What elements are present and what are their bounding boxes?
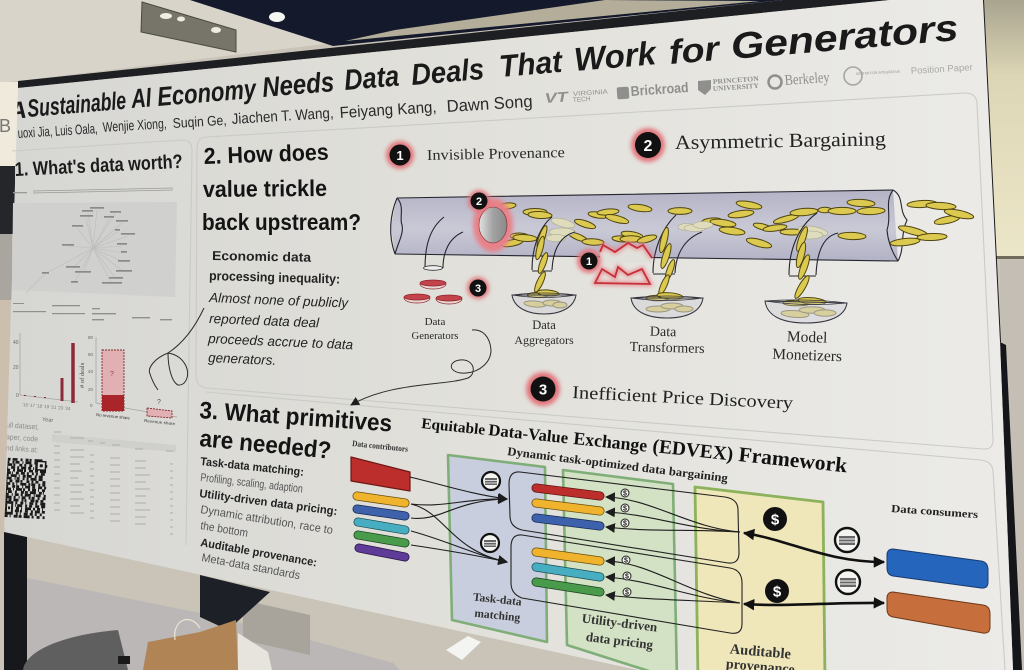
data contributors label: Data contributors (352, 438, 409, 454)
falling coins (533, 225, 812, 300)
contributor arrows (410, 477, 507, 562)
title: Generators (729, 7, 960, 67)
price icons: $ (623, 506, 627, 512)
contributor stripes (357, 496, 405, 557)
text: economic data processing inequality: proceeds accrue to data (207, 331, 354, 352)
title: Sustainable (26, 87, 127, 123)
chart: deals per year: Year (42, 417, 54, 424)
affiliation logos: UNIVERSITY (713, 82, 759, 93)
chart: deals per year: '16 '17 '18 '19 '21 '23 '24 (22, 402, 71, 411)
badge: invisible provenance: Invisible Provenance (427, 145, 565, 164)
heading: how does value trickle back upstream: 2. How does (203, 139, 329, 169)
authors: Feiyang Kang, (339, 99, 437, 122)
affiliation logos: TECH (573, 96, 591, 104)
title (17, 20, 956, 118)
authors: uoxi Jia, Luis Oala, (17, 120, 98, 141)
data generator disks (404, 280, 462, 304)
chart: deals per year: 20 (13, 365, 19, 371)
chart: revenue share: Revenue share (144, 418, 176, 426)
stakeholder labels: Data (425, 316, 445, 328)
heading: what primitives are needed: are needed? (198, 425, 332, 465)
network chart (12, 188, 177, 297)
small badge 1: 1 (586, 256, 592, 268)
coins in the pipe (498, 199, 885, 250)
pipeline diagram (391, 190, 974, 323)
title: That (498, 44, 565, 84)
inner stripes bottom (536, 552, 600, 592)
chart: deals per year (13, 333, 78, 424)
stage: task-data matching: Task-data (472, 591, 522, 609)
text: primitive list: the bottom (200, 520, 249, 540)
badge: invisible provenance (386, 141, 565, 169)
stakeholder labels: Aggregators (514, 333, 574, 347)
framework title: Framework (737, 442, 849, 477)
badge: asymmetric bargaining (631, 128, 886, 162)
text: primitive list: Task-data matching: (200, 456, 304, 479)
heading: what's data worth: 1. What's data worth? (14, 151, 183, 181)
authors: Jiachen T. Wang, (231, 105, 334, 128)
chart: revenue share: ? (157, 399, 161, 406)
small badge 3: 3 (475, 283, 481, 295)
provenance dollar icons: $ (773, 584, 782, 600)
inner stripes top (536, 488, 600, 526)
authors: Wenjie Xiong, (102, 115, 167, 135)
price icons: $ (625, 574, 629, 580)
authors (18, 96, 532, 138)
affiliation logos: PRINCETON (713, 75, 759, 86)
title: A (7, 97, 28, 125)
affiliation logos: Position Paper (911, 62, 973, 77)
coins leaving the pipe (890, 200, 974, 247)
title: Work (572, 34, 659, 78)
dataset link text: and links at: (2, 443, 38, 455)
stakeholder labels: Data (650, 325, 677, 340)
dataset link text (6, 422, 38, 452)
small badge 3 (467, 277, 489, 299)
chart: revenue share: # of deals (79, 362, 86, 388)
text: economic data processing inequality: Economic data (212, 248, 312, 265)
heading: how does value trickle back upstream: back upstream? (202, 209, 361, 235)
badge: inefficient price discovery (526, 372, 794, 413)
stakeholder labels: Generators (412, 330, 458, 342)
text: primitive list (199, 456, 338, 582)
framework title (421, 416, 849, 477)
chart: revenue share: 40 (88, 369, 94, 374)
small badge 2: 2 (476, 196, 482, 208)
text: economic data processing inequality: reported data deal (209, 311, 320, 330)
chart: revenue share: No revenue share (96, 412, 131, 421)
badge: inefficient price discovery: 3 (539, 382, 547, 398)
data consumers label: Data consumers (891, 503, 979, 521)
framework title: (EDVEX) (651, 436, 734, 465)
text: primitive list: Meta-data standards (200, 552, 301, 582)
chart: deals per year: 0 (16, 393, 19, 399)
stage: utility-driven data pricing (563, 470, 677, 670)
chart: revenue share: 60 (88, 352, 94, 357)
provenance dollar icons (763, 507, 789, 603)
affiliation logos: VIRGINIA (573, 89, 609, 98)
dataset link text: Full dataset, (2, 420, 39, 432)
stakeholder labels: Transformers (629, 340, 705, 357)
database icons (481, 472, 860, 594)
task group outlines (509, 472, 742, 633)
badge: invisible provenance: 1 (396, 148, 404, 163)
affiliation logos: VT (544, 88, 570, 106)
affiliation logos: Brickroad (630, 79, 689, 99)
stakeholder labels: Data (532, 318, 556, 332)
authors: Suqin Ge, (172, 112, 227, 131)
title: Economy (156, 74, 259, 112)
title: AI (129, 82, 153, 114)
price icons: $ (624, 558, 628, 564)
small badge 2 (468, 190, 490, 212)
chart: revenue share: 0 (90, 403, 93, 408)
consumer: orange (887, 592, 990, 633)
affiliation logos: CENTER FOR INTEGRATIVE (856, 70, 901, 76)
framework title: Data-Value (488, 420, 569, 447)
price icons: $ (623, 490, 627, 498)
text: economic data processing inequality: generators. (208, 350, 276, 368)
chart: revenue share: ? (110, 371, 114, 378)
affiliation logos (544, 62, 973, 106)
framework title: Exchange (573, 428, 648, 456)
stage: auditable provenance: Auditable (729, 641, 792, 663)
authors: Dawn Song (446, 92, 533, 116)
text: economic data processing inequality (207, 248, 354, 368)
text: primitive list: Utility-driven data pricing: (199, 488, 338, 518)
chart: revenue share: 80 (88, 335, 94, 340)
price icons: $ (625, 590, 629, 596)
chart: revenue share (79, 335, 177, 426)
price icons (621, 489, 631, 596)
stakeholder labels: Monetizers (772, 346, 842, 365)
hand-drawn arrow to framework (351, 330, 491, 405)
heading: what primitives are needed: 3. What primitives (199, 397, 393, 437)
hand-drawn arrow to inequality text (149, 308, 204, 390)
provenance dollar icons: $ (771, 512, 780, 528)
text: economic data processing inequality: Almost none of publicly (208, 290, 350, 311)
stage: utility-driven data pricing: Utility-driven (581, 610, 659, 635)
edvex framework diagram (351, 455, 990, 670)
affiliation logos: Berkeley (784, 70, 831, 89)
spouts (425, 217, 463, 268)
red jagged break (595, 243, 652, 284)
title: Deals (410, 53, 485, 92)
dataset link text: paper, code (2, 432, 38, 444)
hole in the pipe (473, 198, 513, 252)
stage: task-data matching: matching (474, 608, 521, 624)
foreground: carpet and items (23, 619, 481, 670)
price icons: $ (623, 520, 627, 528)
framework subtitle: Dynamic task-optimized data bargaining (507, 444, 729, 485)
model monetizers bowl (765, 296, 847, 323)
stakeholder labels: Model (787, 328, 828, 347)
text: primitive list: Auditable provenance: (199, 537, 318, 569)
text: economic data processing inequality: processing inequality: (209, 268, 340, 286)
stage: task-data matching (448, 455, 547, 642)
data transformers bowl (631, 292, 703, 318)
heading: how does value trickle back upstream: value trickle (203, 175, 327, 202)
QR code (5, 459, 48, 518)
heading: how does value trickle back upstream (202, 139, 361, 235)
badge: inefficient price discovery: Inefficient Price Discovery (572, 382, 794, 413)
consumer arrows (744, 533, 884, 605)
text: primitive list: Profiling, scaling, adaption (200, 472, 303, 496)
chart: deals per year: 40 (13, 340, 19, 346)
chart: revenue share: 20 (88, 387, 94, 392)
title: for (667, 30, 722, 72)
small badge 1 (577, 249, 601, 273)
badge: asymmetric bargaining: Asymmetric Bargaining (675, 128, 886, 154)
consumer: blue (887, 549, 988, 588)
stakeholder labels (412, 316, 842, 365)
stage: auditable provenance (695, 487, 825, 670)
stage: utility-driven data pricing: data pricing (585, 629, 654, 652)
contributor: red (351, 457, 410, 491)
data aggregators bowl (512, 289, 576, 314)
legend lines (13, 303, 172, 320)
text: primitive list: Dynamic attribution, race to (200, 504, 334, 537)
pricing arrows (606, 497, 740, 603)
badge: asymmetric bargaining: 2 (644, 138, 653, 155)
title: Data (343, 60, 400, 97)
data table (52, 432, 176, 534)
title: Needs (261, 66, 335, 103)
heading: what primitives are needed (198, 397, 393, 465)
framework title: Equitable (421, 416, 486, 439)
